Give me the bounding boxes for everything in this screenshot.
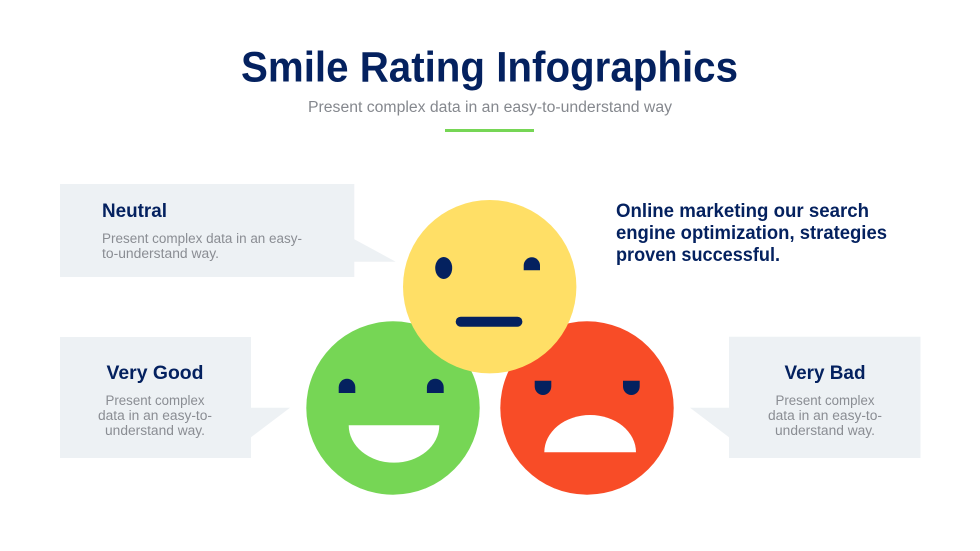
- very bad heading: Very Bad: [784, 363, 866, 384]
- neutral heading: Neutral: [102, 201, 167, 222]
- very bad body text: understand way.: [775, 423, 875, 438]
- very bad body text: Present complex: [776, 393, 875, 408]
- very good body text: Present complex: [106, 393, 205, 408]
- panel: neutral callout: [60, 184, 396, 277]
- statement text: [616, 201, 887, 266]
- very good body text: understand way.: [105, 423, 205, 438]
- neutral body text: to-understand way.: [102, 246, 219, 261]
- neutral body text: [102, 231, 302, 261]
- title underline accent: [445, 129, 534, 132]
- neutral body text: Present complex data in an easy-: [102, 231, 302, 246]
- icon: green smiling face: [306, 321, 480, 495]
- very good heading: Very Good: [106, 363, 204, 384]
- panel: very bad callout: [690, 337, 920, 458]
- icon: yellow neutral face: [403, 200, 576, 373]
- subtitle: Present complex data in an easy-to-understand way: [308, 99, 672, 116]
- panel: very good callout: [60, 337, 290, 458]
- title: Smile Rating Infographics: [241, 44, 738, 92]
- very bad body text: data in an easy-to-: [768, 408, 882, 423]
- statement text: proven successful.: [616, 245, 780, 266]
- statement text: engine optimization, strategies: [616, 223, 887, 244]
- very bad body text: [768, 393, 882, 438]
- statement text: Online marketing our search: [616, 201, 869, 222]
- very good body text: [98, 393, 212, 438]
- very good body text: data in an easy-to-: [98, 408, 212, 423]
- icon: red frowning face: [500, 321, 674, 495]
